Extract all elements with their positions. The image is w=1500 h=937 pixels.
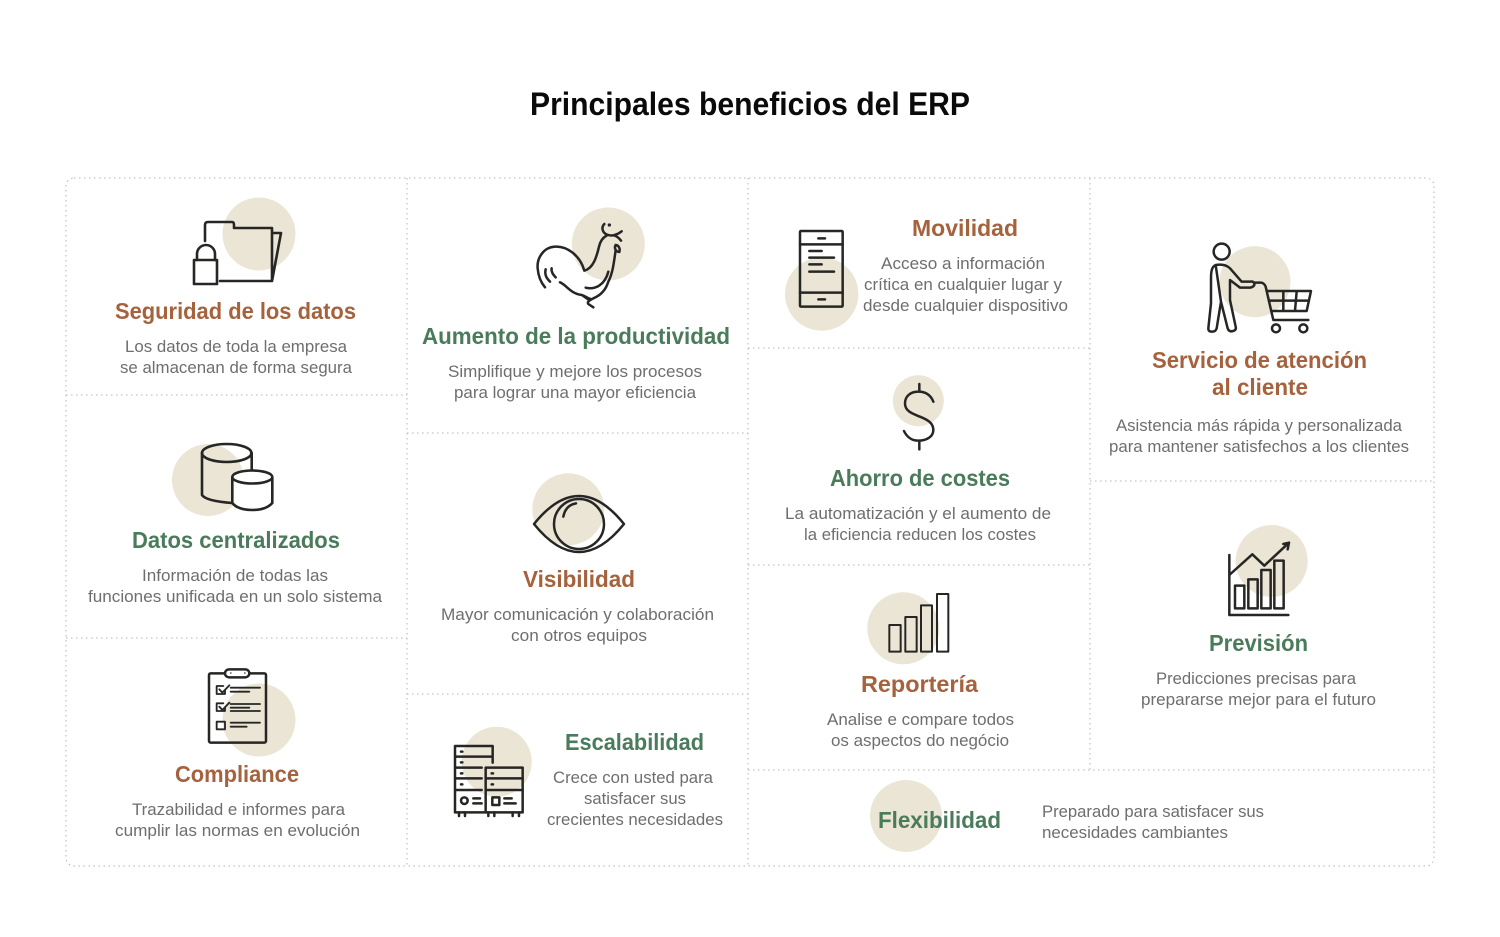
description <box>448 362 702 402</box>
panel: Escalabilidad <box>407 694 748 866</box>
description: se almacenan de forma segura <box>120 358 353 377</box>
heading: Compliance <box>175 761 299 787</box>
description: satisfacer sus <box>584 789 686 808</box>
description: os aspectos do negócio <box>831 731 1009 750</box>
heading: Visibilidad <box>523 566 635 592</box>
description: Trazabilidad e informes para <box>132 800 346 819</box>
description <box>120 337 353 377</box>
description <box>827 710 1014 750</box>
heading: Escalabilidad <box>565 729 704 755</box>
description: prepararse mejor para el futuro <box>1141 690 1376 709</box>
description: necesidades cambiantes <box>1042 823 1228 842</box>
icon: folder with padlock <box>194 198 296 284</box>
panel: Datos centralizados <box>66 395 407 638</box>
heading: Aumento de la productividad <box>422 323 730 349</box>
description: Predicciones precisas para <box>1156 669 1357 688</box>
description <box>547 768 723 829</box>
description: funciones unificada en un solo sistema <box>88 587 383 606</box>
description: crítica en cualquier lugar y <box>864 275 1062 294</box>
panel: Reportería <box>748 565 1090 770</box>
description: Analise e compare todos <box>827 710 1014 729</box>
description <box>1042 802 1264 842</box>
panel: Servicio de atención al cliente <box>1090 178 1434 481</box>
panel: Visibilidad <box>407 433 748 694</box>
description <box>1141 669 1376 709</box>
panel: Aumento de la productividad <box>407 178 748 433</box>
description <box>441 605 714 645</box>
heading: Movilidad <box>912 215 1018 241</box>
description <box>88 566 383 606</box>
description <box>1109 416 1409 456</box>
description: Asistencia más rápida y personalizada <box>1116 416 1403 435</box>
description <box>863 254 1068 315</box>
description: Información de todas las <box>142 566 328 585</box>
icon: clipboard checklist <box>209 669 296 756</box>
description <box>785 504 1051 544</box>
panel: Seguridad de los datos <box>66 178 407 395</box>
description: Acceso a información <box>881 254 1045 273</box>
panel: Previsión <box>1090 481 1434 770</box>
heading: Flexibilidad <box>878 807 1001 833</box>
heading: Previsión <box>1209 630 1308 656</box>
description: la eficiencia reducen los costes <box>804 525 1036 544</box>
icon: servers <box>455 727 532 816</box>
icon: person with shopping cart <box>1208 244 1311 332</box>
icon: dollar sign <box>893 375 944 449</box>
description: con otros equipos <box>511 626 647 645</box>
icon: bar chart <box>867 592 948 664</box>
icon: forecast chart <box>1229 525 1308 615</box>
heading: Ahorro de costes <box>830 465 1010 491</box>
icon: rooster <box>538 208 645 307</box>
panel: Ahorro de costes <box>748 348 1090 565</box>
icon: eye <box>532 473 624 552</box>
description <box>115 800 360 840</box>
description: crecientes necesidades <box>547 810 723 829</box>
icon: circle backdrop <box>870 780 942 852</box>
panel: Flexibilidad <box>748 770 1434 866</box>
panel: Movilidad <box>748 178 1090 348</box>
description: para lograr una mayor eficiencia <box>454 383 697 402</box>
heading: Reportería <box>861 671 978 697</box>
heading: al cliente <box>1212 374 1308 400</box>
description: Mayor comunicación y colaboración <box>441 605 714 624</box>
heading <box>1152 347 1367 400</box>
heading: Seguridad de los datos <box>115 298 356 324</box>
description: Crece con usted para <box>553 768 714 787</box>
icon: mobile device <box>785 231 858 331</box>
title: Principales beneficios del ERP <box>530 86 970 122</box>
description: Simplifique y mejore los procesos <box>448 362 702 381</box>
description: cumplir las normas en evolución <box>115 821 360 840</box>
heading: Servicio de atención <box>1152 347 1367 373</box>
description: Preparado para satisfacer sus <box>1042 802 1264 821</box>
description: La automatización y el aumento de <box>785 504 1051 523</box>
icon: databases <box>172 444 272 516</box>
heading: Datos centralizados <box>132 527 340 553</box>
description: Los datos de toda la empresa <box>125 337 348 356</box>
panel: Compliance <box>66 638 407 866</box>
description: para mantener satisfechos a los clientes <box>1109 437 1409 456</box>
description: desde cualquier dispositivo <box>863 296 1068 315</box>
